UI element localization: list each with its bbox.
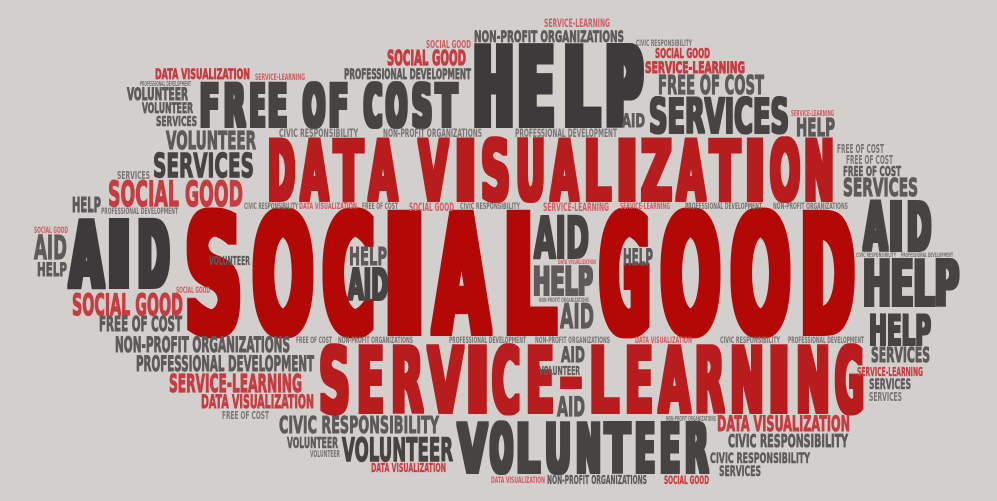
word: DATA VISUALIZATION: A xyxy=(301,123,328,220)
word: VOLUNTEER lower small: VOLUNTEER xyxy=(287,434,338,452)
text: VOLUNTEER xyxy=(209,253,250,268)
word: CIVIC RESPONSIBILITY top right: CIVIC RESPONSIBILITY xyxy=(636,39,692,49)
word: DATA VISUALIZATION: O xyxy=(770,123,800,220)
word: VOLUNTEER (large): O xyxy=(490,410,513,488)
word: DATA VISUALIZATION xyxy=(268,123,834,220)
word: SERVICE-LEARNING: N xyxy=(796,329,830,434)
word: AID (large left): I xyxy=(105,202,133,309)
word: SERVICE-LEARNING top centre: SERVICE-LEARNING xyxy=(544,16,610,30)
word: AID over hyphen: AID xyxy=(561,343,585,367)
text: FREE OF COST xyxy=(837,141,884,156)
word: FREE OF COST band: FREE OF COST xyxy=(296,336,332,346)
word: SERVICE-LEARNING: I xyxy=(766,329,792,434)
text: PROFESSIONAL DEVELOPMENT xyxy=(101,207,178,217)
text: G xyxy=(835,329,864,434)
word: SERVICES tiny left: SERVICES xyxy=(117,170,150,182)
word: VOLUNTEER (large): V xyxy=(458,410,487,488)
word: SOCIAL GOOD top right: SOCIAL GOOD xyxy=(655,47,710,62)
word: FREE OF COST right three: FREE OF COST xyxy=(843,164,901,180)
word: SERVICE-LEARNING small right: SERVICE-LEARNING xyxy=(791,109,834,118)
word: HELP left: HELP xyxy=(72,193,101,217)
word: VOLUNTEER (large): T xyxy=(605,410,630,488)
word: FREE OF COST: O xyxy=(386,72,407,140)
word: HELP (top centre) xyxy=(474,26,642,151)
word: SOCIAL GOOD (largest) xyxy=(185,180,854,372)
text: NON-PROFIT ORGANIZATIONS xyxy=(547,472,647,487)
word: FREE OF COST: F xyxy=(200,72,219,140)
word: AID (large left): A xyxy=(70,202,103,309)
word: SERVICES right small: SERVICES xyxy=(869,377,911,393)
word: AID top: AID xyxy=(622,110,645,132)
word: FREE OF COST: F xyxy=(329,72,348,140)
word: VOLUNTEER (large): N xyxy=(576,410,601,488)
word: FREE OF COST: C xyxy=(364,72,382,140)
text: AID xyxy=(348,260,388,311)
word: SOCIAL GOOD (largest): S xyxy=(185,180,242,372)
word: SERVICE-LEARNING: V xyxy=(428,329,463,434)
word: AID (large right): I xyxy=(888,189,904,266)
word: PROFESSIONAL DEVELOPMENT band two: PROFESSIONAL DEVELOPMENT xyxy=(788,336,864,346)
word: DATA VISUALIZATION: U xyxy=(516,123,545,220)
word: CIVIC RESPONSIBILITY lower right small: CIVIC RESPONSIBILITY xyxy=(710,451,810,467)
word: NON-PROFIT ORGANIZATIONS top centre: NON-PROFIT ORGANIZATIONS xyxy=(474,27,624,46)
text: HELP xyxy=(623,246,653,271)
text: DATA VISUALIZATION xyxy=(558,258,596,266)
word: PROFESSIONAL DEVELOPMENT top: PROFESSIONAL DEVELOPMENT xyxy=(344,67,471,83)
word: VOLUNTEER (large) xyxy=(458,410,708,488)
word: SERVICE-LEARNING: C xyxy=(492,329,520,434)
word: VOLUNTEER (large): E xyxy=(635,410,655,488)
word: SERVICES right tiny: SERVICES xyxy=(869,390,902,404)
word: SOCIAL GOOD bottom: SOCIAL GOOD xyxy=(664,473,709,487)
word: SOCIAL GOOD (largest): O xyxy=(253,180,313,372)
word: SERVICES left: SERVICES xyxy=(153,146,254,185)
text: SERVICE-LEARNING xyxy=(169,369,302,398)
word: PROFESSIONAL DEVELOPMENT band: PROFESSIONAL DEVELOPMENT xyxy=(449,336,526,346)
word: SOCIAL GOOD tiny: SOCIAL GOOD xyxy=(176,286,210,296)
text: PROFESSIONAL DEVELOPMENT xyxy=(136,352,314,376)
word: SERVICE-LEARNING right: SERVICE-LEARNING xyxy=(857,365,923,379)
word: HELP centre: HELP xyxy=(533,260,593,305)
word: DATA VISUALIZATION: T xyxy=(710,123,740,220)
word: DATA VISUALIZATION band: DATA VISUALIZATION xyxy=(635,336,692,346)
word: HELP (top centre): L xyxy=(564,26,599,151)
word: DATA VISUALIZATION bottom: DATA VISUALIZATION xyxy=(371,461,446,475)
text: SOCIAL GOOD xyxy=(108,175,243,215)
word: HELP inside C: HELP xyxy=(349,242,387,271)
word: DATA VISUALIZATION: Z xyxy=(641,123,672,220)
word: SERVICES right: SERVICES xyxy=(843,173,918,202)
word: SERVICES small left: SERVICES xyxy=(156,115,197,130)
text: FREE OF COST xyxy=(846,153,893,167)
word: SOCIAL GOOD row: SOCIAL GOOD xyxy=(409,200,454,214)
word: CIVIC RESPONSIBILITY lower left: CIVIC RESPONSIBILITY xyxy=(279,413,439,439)
word: SOCIAL GOOD (largest): O xyxy=(731,180,790,372)
text: D xyxy=(138,202,169,309)
word: SERVICE-LEARNING top right: SERVICE-LEARNING xyxy=(645,58,745,77)
word: DATA VISUALIZATION: I xyxy=(452,123,479,220)
word: FREE OF COST row: FREE OF COST xyxy=(362,202,398,212)
word: NON-PROFIT ORGANIZATIONS row: NON-PROFIT ORGANIZATIONS xyxy=(773,202,848,212)
word: DATA VISUALIZATION: S xyxy=(481,123,510,220)
word: DATA VISUALIZATION bottom centre: DATA VISUALIZATION xyxy=(491,476,545,486)
word: SOCIAL GOOD top: SOCIAL GOOD xyxy=(387,46,466,70)
word: SOCIAL GOOD (largest): O xyxy=(661,180,720,372)
word: PROFESSIONAL DEVELOPMENT row: PROFESSIONAL DEVELOPMENT xyxy=(685,202,762,212)
word: DATA VISUALIZATION: I xyxy=(614,123,640,220)
word: SERVICE-LEARNING: E xyxy=(526,329,554,434)
word: SERVICE-LEARNING: - xyxy=(559,345,583,415)
text: R xyxy=(685,410,708,488)
word: SOCIAL GOOD (largest): A xyxy=(434,180,489,372)
word: NON-PROFIT ORGANIZATIONS band two: NON-PROFIT ORGANIZATIONS xyxy=(535,336,610,346)
word: VOLUNTEER over hyphen: VOLUNTEER xyxy=(539,364,580,378)
word: CIVIC RESPONSIBILITY row: CIVIC RESPONSIBILITY xyxy=(244,202,298,212)
word: SERVICE-LEARNING: R xyxy=(391,329,423,434)
word: VOLUNTEER upper left: VOLUNTEER xyxy=(127,85,188,105)
word: SOCIAL GOOD (largest): I xyxy=(379,180,430,372)
text: VOLUNTEER xyxy=(310,449,340,460)
text: PROFESSIONAL DEVELOPMENT xyxy=(140,80,191,88)
word: SOCIAL GOOD (largest): L xyxy=(503,180,556,372)
text: N xyxy=(804,123,834,220)
word: SOCIAL GOOD (largest): C xyxy=(323,180,374,372)
word: AID under hyphen: AID xyxy=(557,392,585,423)
text: NON-PROFIT ORGANIZATIONS xyxy=(539,296,589,304)
word: DATA VISUALIZATION: A xyxy=(551,123,578,220)
word: DATA VISUALIZATION: A xyxy=(369,123,397,220)
word: FREE OF COST: E xyxy=(250,72,265,140)
word: SERVICE-LEARNING: I xyxy=(463,329,492,434)
word: SERVICE-LEARNING: E xyxy=(625,329,653,434)
text: NON-PROFIT ORGANIZATIONS xyxy=(666,415,716,423)
word: VOLUNTEER (large): L xyxy=(516,410,540,488)
word: DATA VISUALIZATION top left: DATA VISUALIZATION xyxy=(155,67,250,83)
word: HELP (top centre): H xyxy=(474,26,513,151)
word: SERVICE-LEARNING row two: SERVICE-LEARNING xyxy=(620,202,670,212)
word: SERVICE-LEARNING row: SERVICE-LEARNING xyxy=(543,200,609,214)
word: SERVICE-LEARNING: S xyxy=(319,329,350,434)
word: HELP upper right: HELP xyxy=(796,113,835,142)
text: NON-PROFIT ORGANIZATIONS xyxy=(115,333,290,357)
word: DATA VISUALIZATION: D xyxy=(268,123,295,220)
word: SERVICE-LEARNING xyxy=(319,329,864,434)
word: SERVICE-LEARNING: L xyxy=(589,329,619,434)
text: D xyxy=(907,189,931,266)
word: SERVICES lower right: SERVICES xyxy=(719,464,761,480)
word: VOLUNTEER left: VOLUNTEER xyxy=(166,126,256,155)
word: FREE OF COST: O xyxy=(303,72,325,140)
text: D xyxy=(801,180,854,372)
word: FREE OF COST: S xyxy=(412,72,432,140)
text: CIVIC RESPONSIBILITY xyxy=(856,251,896,259)
word: HELP right medium: HELP xyxy=(869,306,931,355)
word: NON-PROFIT ORGANIZATIONS band: NON-PROFIT ORGANIZATIONS xyxy=(338,336,413,346)
word: SERVICES right medium: SERVICES xyxy=(871,343,930,367)
word: CIVIC RESPONSIBILITY row two: CIVIC RESPONSIBILITY xyxy=(460,202,520,212)
word: VOLUNTEER (large): U xyxy=(545,410,571,488)
word: AID small left: AID xyxy=(34,228,67,267)
word: AID (large right): A xyxy=(864,189,887,266)
word: SERVICE-LEARNING: N xyxy=(730,329,764,434)
word: AID lower centre: AID xyxy=(560,297,594,337)
word: FREE OF COST xyxy=(200,72,457,140)
word: HELP small left: HELP xyxy=(37,259,67,281)
word: SERVICE-LEARNING top left: SERVICE-LEARNING xyxy=(255,73,305,83)
word: SERVICE-LEARNING: A xyxy=(659,329,690,434)
text: AID xyxy=(534,204,589,272)
word: VOLUNTEER second left: VOLUNTEER xyxy=(142,101,193,117)
word: FREE OF COST: T xyxy=(436,72,457,140)
word: FREE OF COST top right: FREE OF COST xyxy=(658,71,764,101)
word: FREE OF COST: E xyxy=(268,72,287,140)
word: VOLUNTEER (large): E xyxy=(660,410,680,488)
word: SOCIAL GOOD (largest): G xyxy=(600,180,650,372)
word: FREE OF COST left: FREE OF COST xyxy=(99,312,182,336)
word: SERVICES top right: SERVICES xyxy=(649,89,789,145)
word: SERVICE-LEARNING: R xyxy=(695,329,724,434)
word: CIVIC RESPONSIBILITY band: CIVIC RESPONSIBILITY xyxy=(720,336,780,346)
text: P xyxy=(606,26,642,151)
word: HELP (top centre): E xyxy=(518,26,554,151)
word: DATA VISUALIZATION: T xyxy=(334,123,363,220)
word: DATA VISUALIZATION: A xyxy=(677,123,705,220)
text: SOCIAL GOOD xyxy=(34,226,68,236)
word: DATA VISUALIZATION lower right: DATA VISUALIZATION xyxy=(717,412,850,436)
word: CIVIC RESPONSIBILITY lower right: CIVIC RESPONSIBILITY xyxy=(728,431,849,452)
word: DATA VISUALIZATION: L xyxy=(584,123,611,220)
word: PROFESSIONAL DEVELOPMENT upper right: PROFESSIONAL DEVELOPMENT xyxy=(515,126,617,140)
word: SOCIAL GOOD top small: SOCIAL GOOD xyxy=(426,38,471,51)
word: DATA VISUALIZATION: V xyxy=(419,123,448,220)
word: DATA VISUALIZATION: I xyxy=(743,123,767,220)
word: FREE OF COST: R xyxy=(224,72,245,140)
word: CIVIC RESPONSIBILITY top: CIVIC RESPONSIBILITY xyxy=(279,126,358,140)
word: NON-PROFIT ORGANIZATIONS top: NON-PROFIT ORGANIZATIONS xyxy=(383,126,482,140)
word: SERVICE-LEARNING: E xyxy=(357,329,384,434)
word: VOLUNTEER lower medium: VOLUNTEER xyxy=(342,431,453,469)
word: DATA VISUALIZATION left: DATA VISUALIZATION xyxy=(201,391,314,413)
word: DATA VISUALIZATION row: DATA VISUALIZATION xyxy=(299,202,357,212)
text: SOCIAL GOOD xyxy=(72,288,183,322)
word: FREE OF COST lower left: FREE OF COST xyxy=(222,410,269,422)
